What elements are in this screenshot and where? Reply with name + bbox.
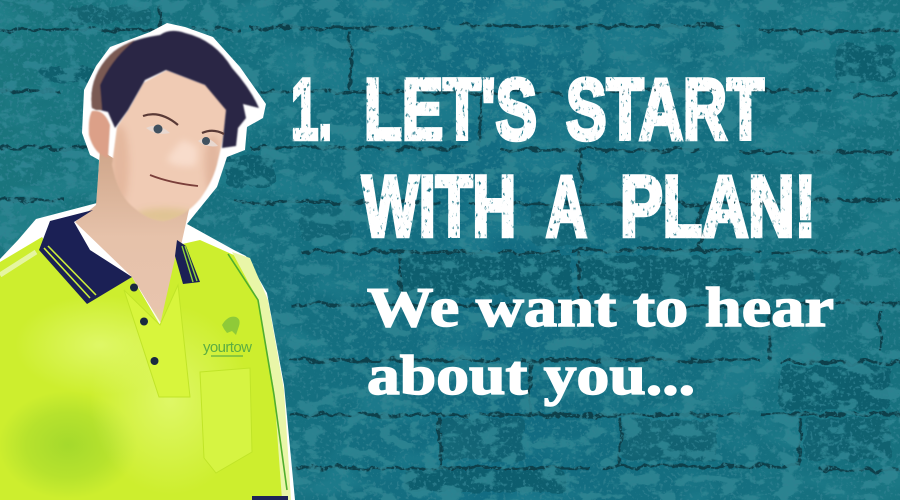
white sticker outline [0,23,295,500]
ear [89,111,110,158]
eyebrows [143,114,224,134]
person cut-out [0,23,295,500]
neck [75,150,190,325]
shirt highlight: centre [90,305,250,495]
shirt shading: lower left [0,391,138,499]
heading: 1. Let's start with a plan!: 1. [291,62,332,158]
face [111,70,228,224]
shirt logo: yourtow [203,339,252,356]
reflective sleeve stripe [232,252,291,500]
face shading [112,126,130,198]
shirt buttons [130,284,158,365]
green sleeve piping [228,254,287,490]
shirt [0,237,291,500]
hair [91,31,259,148]
left shoulder stripe [0,252,36,275]
subheading: We want to hear [367,277,834,339]
heading: 1. Let's start with a plan! [291,62,816,255]
right collar [175,240,200,284]
heading: 1. Let's start with a plan!: PLAN! [620,159,816,255]
nose [167,140,197,166]
eyes [146,124,218,146]
subheading: about you... [367,345,695,407]
left collar [39,210,132,304]
shirt highlight: chest [15,295,185,395]
heading: 1. Let's start with a plan!: A [546,159,587,255]
pocket [200,368,252,473]
heading: 1. Let's start with a plan!: WITH [362,159,516,255]
placket [124,285,190,397]
smile [150,175,198,186]
subheading [367,277,834,407]
heading: 1. Let's start with a plan!: LET'S [364,62,537,158]
cuff [252,496,288,500]
shirt logo [203,317,252,357]
heading: 1. Let's start with a plan!: START [566,62,764,158]
